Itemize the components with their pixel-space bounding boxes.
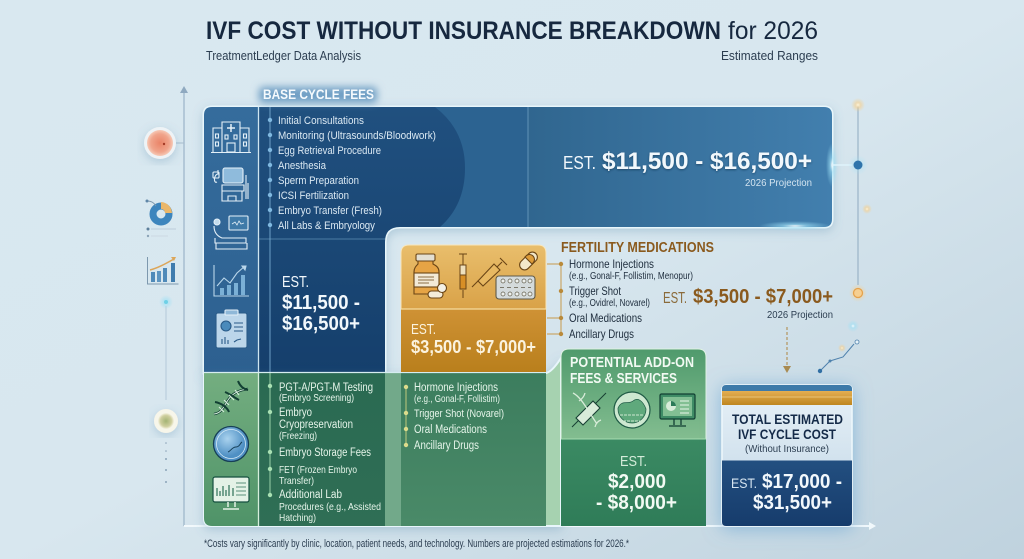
estimate: add-on fees: - $8,000+: [596, 492, 677, 514]
estimate: medications card: $3,500 - $7,000+: [411, 337, 536, 357]
icon: blister pack: [496, 276, 535, 299]
list: medications in green band: [404, 382, 504, 452]
estimate: add-on fees: $2,000: [608, 471, 666, 493]
icon: diagonal syringe: [472, 258, 507, 287]
list: base cycle items: [268, 115, 436, 232]
estimate: add-on fees: [596, 453, 677, 514]
list: medications in green band: Ancillary Drugs: [414, 440, 479, 452]
list: fertility medications: (e.g., Ovidrel, Novarel): [569, 298, 650, 309]
icon: lab monitor: [213, 477, 249, 509]
list: add-on services: [268, 382, 381, 524]
panel: total estimated cost: [722, 385, 852, 526]
icon: trending chart: [214, 265, 249, 296]
estimate: total cost: EST.: [731, 475, 757, 491]
list: medications in green band: Trigger Shot (Novarel): [414, 408, 504, 420]
heading: add-on fees: [570, 355, 694, 387]
icon: vertical syringe: [459, 254, 467, 298]
heading: fertility medications: FERTILITY MEDICATIONS: [561, 240, 714, 256]
heading: add-on fees: FEES & SERVICES: [570, 371, 677, 387]
list: base cycle items: Egg Retrieval Procedure: [278, 145, 381, 157]
right rail with nodes: [832, 98, 872, 302]
list: add-on services: Hatching): [279, 512, 316, 524]
list: base cycle items: Monitoring (Ultrasounds/Bloodwork): [278, 130, 436, 142]
estimate: add-on fees: EST.: [620, 453, 647, 470]
list: fertility medications: Oral Medications: [569, 311, 642, 325]
estimate: fertility medications: EST.: [663, 290, 687, 307]
heading: base cycle fees: BASE CYCLE FEES: [263, 87, 374, 102]
list: fertility medications: Hormone Injections: [569, 257, 654, 271]
left rail: donut chart icon: [146, 200, 176, 237]
left rail: glowing node and line: [159, 295, 173, 400]
list: base cycle items: ICSI Fertilization: [278, 190, 349, 202]
horizontal axis arrow: [184, 522, 876, 530]
icon: ultrasound machine: [213, 168, 248, 201]
estimate: fertility medications: $3,500 - $7,000+: [693, 286, 833, 308]
panel: base cycle fees: [204, 107, 838, 373]
list: add-on services: PGT-A/PGT-M Testing: [279, 382, 373, 394]
icon: pill bottle: [414, 254, 446, 298]
subtitle: source: TreatmentLedger Data Analysis: [206, 48, 361, 63]
list: base cycle items: Sperm Preparation: [278, 175, 359, 187]
list: add-on services: (Embryo Screening): [279, 393, 354, 404]
list: base cycle items: Embryo Transfer (Fresh): [278, 205, 382, 217]
list: fertility medications: Ancillary Drugs: [569, 327, 634, 341]
list: medications in green band: Hormone Injections: [414, 382, 498, 394]
title: IVF COST WITHOUT INSURANCE BREAKDOWN: [206, 17, 721, 45]
icon: DNA helix: [214, 381, 248, 414]
left rail: bar chart icon: [148, 257, 178, 284]
list: add-on services: Embryo: [279, 407, 312, 419]
left rail: dots: [165, 442, 167, 483]
heading: add-on fees: POTENTIAL ADD-ON: [570, 355, 694, 371]
left rail: egg icon: [144, 127, 184, 159]
panel: potential add-on fees card: [561, 349, 706, 526]
heading: total cost: TOTAL ESTIMATED: [732, 411, 843, 427]
vertical axis arrow: [180, 86, 188, 526]
list: fertility medications: [569, 257, 693, 341]
estimate: base cycle top right: [563, 148, 812, 189]
list: base cycle items: Anesthesia: [278, 160, 327, 172]
list: add-on services: Cryopreservation: [279, 419, 353, 431]
icon: monitor with pie chart: [660, 394, 695, 426]
panel: fertility medications card: [401, 245, 546, 372]
subtitle: estimated ranges: Estimated Ranges: [721, 48, 818, 63]
estimate: base cycle top right: EST.: [563, 153, 596, 173]
list: add-on services: Additional Lab: [279, 489, 342, 501]
icon: capsule: [518, 250, 539, 272]
list: add-on services: Embryo Storage Fees: [279, 447, 371, 459]
estimate: base cycle column: EST.: [282, 274, 309, 291]
icon: petri dish: [214, 426, 248, 462]
list: medications in green band: (e.g., Gonal-F, Follistim): [414, 394, 500, 405]
title: for 2026: [728, 17, 818, 45]
estimate: medications card: EST.: [411, 321, 436, 338]
icon: procedure chair with monitor: [214, 216, 248, 249]
footnote: *Costs vary significantly by clinic, location, patient needs, and technology. Numbers are projected estimations for 2026.*: [204, 538, 630, 550]
list: medications in green band: Oral Medications: [414, 424, 487, 436]
list: fertility medications: (e.g., Gonal-F, Follistim, Menopur): [569, 271, 693, 282]
list: fertility medications: Trigger Shot: [569, 284, 622, 298]
left rail: seed circle icon: [154, 409, 178, 433]
icon: syringe and DNA: [572, 393, 606, 427]
estimate: medications card: [411, 321, 536, 357]
heading: total cost: [732, 411, 843, 455]
icon: hospital: [211, 122, 251, 152]
estimate: total cost: [731, 471, 842, 514]
list: base cycle items: All Labs & Embryology: [278, 220, 375, 232]
estimate: fertility medications: 2026 Projection: [767, 309, 833, 321]
list: base cycle items: Initial Consultations: [278, 115, 364, 127]
panel: add-on fees green band: [204, 358, 561, 526]
icon: embryo cells: [614, 392, 650, 428]
estimate: base cycle column: $16,500+: [282, 313, 360, 335]
list: add-on services: Transfer): [279, 475, 314, 487]
estimate: fertility medications: [663, 286, 833, 321]
list: add-on services: (Freezing): [279, 431, 317, 442]
heading: total cost: IVF CYCLE COST: [738, 426, 836, 442]
bracket connector: [547, 262, 563, 336]
list: add-on services: Procedures (e.g., Assisted: [279, 501, 381, 513]
trend line icon: [818, 320, 859, 373]
estimate: base cycle column: [282, 274, 360, 335]
estimate: total cost: $17,000 -: [762, 471, 842, 493]
estimate: total cost: $31,500+: [753, 492, 832, 514]
estimate: base cycle top right: $11,500 - $16,500+: [602, 148, 812, 175]
estimate: base cycle column: $11,500 -: [282, 292, 360, 314]
icon: clipboard report: [216, 310, 247, 348]
dashed arrow to total: [783, 327, 791, 373]
list: add-on services: FET (Frozen Embryo: [279, 464, 357, 476]
estimate: base cycle top right: 2026 Projection: [745, 177, 812, 189]
heading: total cost: (Without Insurance): [745, 443, 829, 455]
